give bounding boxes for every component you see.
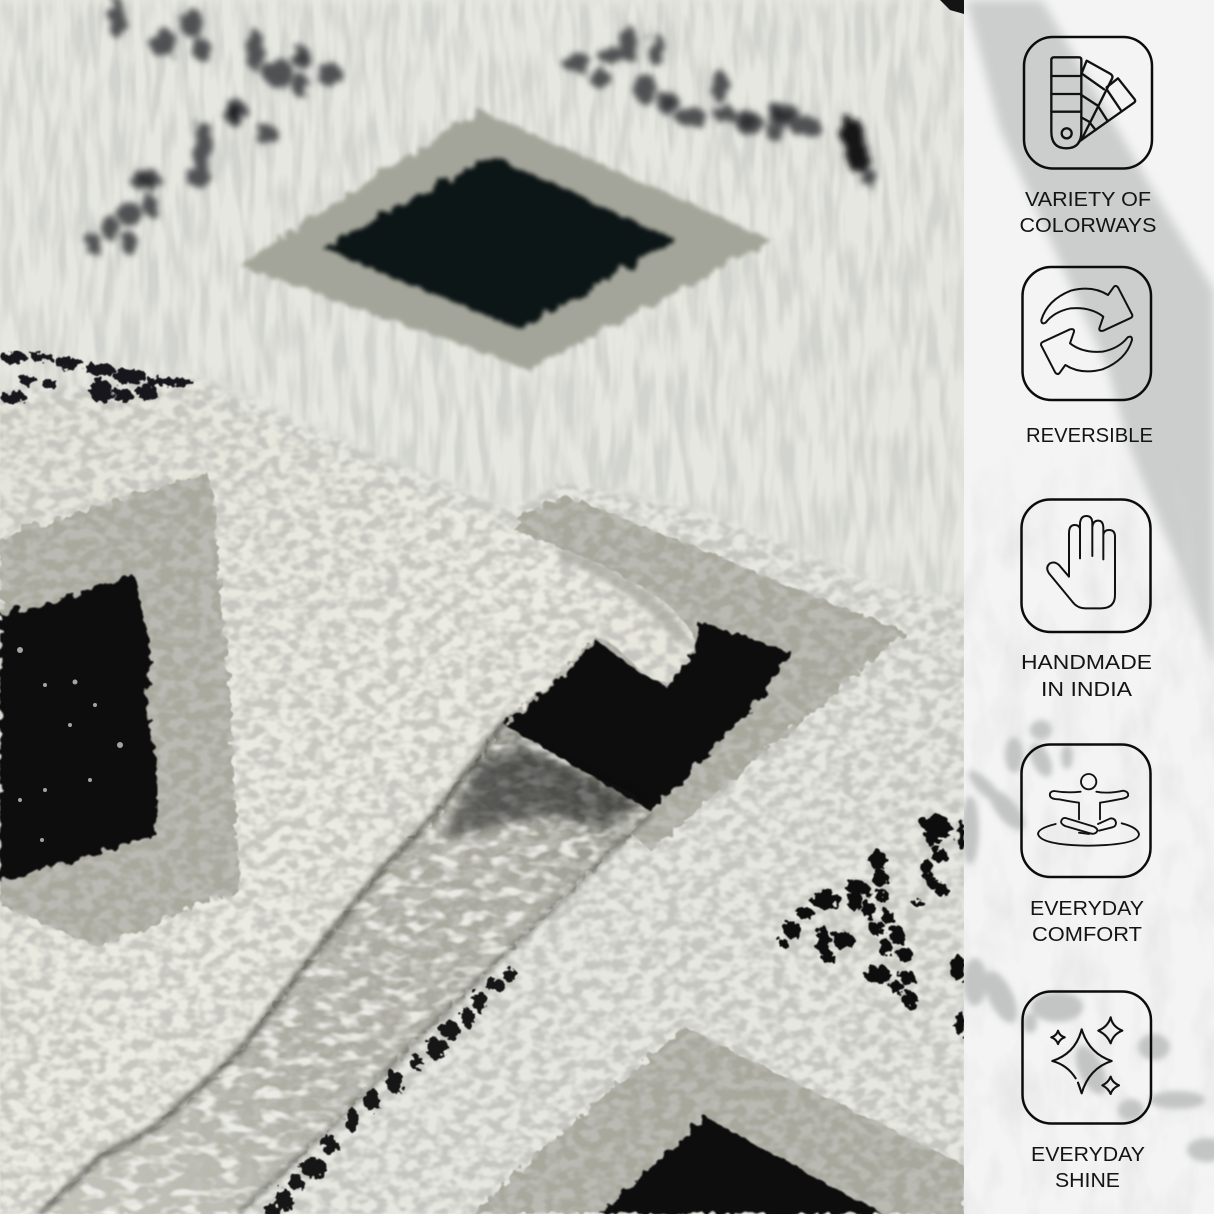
label: handmade: HANDMADE (1021, 651, 1152, 674)
icon: circular arrows (1022, 267, 1151, 400)
lower chunky weave texture (0, 370, 964, 1214)
flap edge shadow (40, 721, 505, 1214)
fold shadow on layer two (445, 745, 640, 838)
label: colorways line: COLORWAYS (1020, 214, 1156, 237)
lower right black motif clusters (779, 815, 964, 1035)
feature: handmade in india (1021, 500, 1152, 701)
upper vertical yarn texture (0, 0, 964, 620)
label: everyday: EVERYDAY (1031, 1143, 1145, 1166)
icon: hand (1022, 500, 1150, 632)
right black diamond below the lip (505, 622, 792, 812)
folded flap (104, 530, 695, 1152)
flap lip shading (560, 552, 682, 640)
bottom right diamond border (470, 1027, 964, 1214)
icon: seated meditation figure (1022, 744, 1150, 877)
feature: reversible (1022, 267, 1153, 447)
strip black motif (2, 353, 192, 403)
label: in india: IN INDIA (1041, 678, 1132, 701)
fold line black motif (266, 970, 516, 1214)
flap diamond border (0, 472, 240, 948)
label: everyday: EVERYDAY (1030, 897, 1144, 920)
icon: sparkles (1022, 992, 1151, 1124)
flap diamond centre flecks (17, 647, 123, 842)
panel: feature sidebar background (961, 0, 1214, 1214)
upper rug diamond border (238, 110, 772, 370)
flap diamond centre (0, 575, 158, 882)
label: comfort: COMFORT (1032, 923, 1142, 946)
second rug layer (40, 721, 651, 1214)
second layer edge shadow (238, 813, 651, 1214)
label: variety of colorways: VARIETY OF (1025, 188, 1151, 211)
photo: folded rug (0, 0, 964, 1214)
label: shine: SHINE (1055, 1169, 1120, 1192)
feature: everyday comfort (1022, 744, 1150, 946)
icon: colour swatch fan (1024, 37, 1152, 168)
upper right black motif (565, 27, 873, 185)
upper diamond centre (322, 155, 676, 330)
feature: everyday shine (1022, 992, 1151, 1192)
corner shadow (940, 0, 964, 14)
label: reversible: REVERSIBLE (1026, 424, 1153, 447)
lower right diamond border (505, 495, 905, 850)
layer two light yarn texture (40, 720, 660, 1214)
upper left black motif (89, 0, 340, 254)
bottom diamond centre (600, 1117, 882, 1214)
feature: variety of colorways (1020, 37, 1156, 237)
